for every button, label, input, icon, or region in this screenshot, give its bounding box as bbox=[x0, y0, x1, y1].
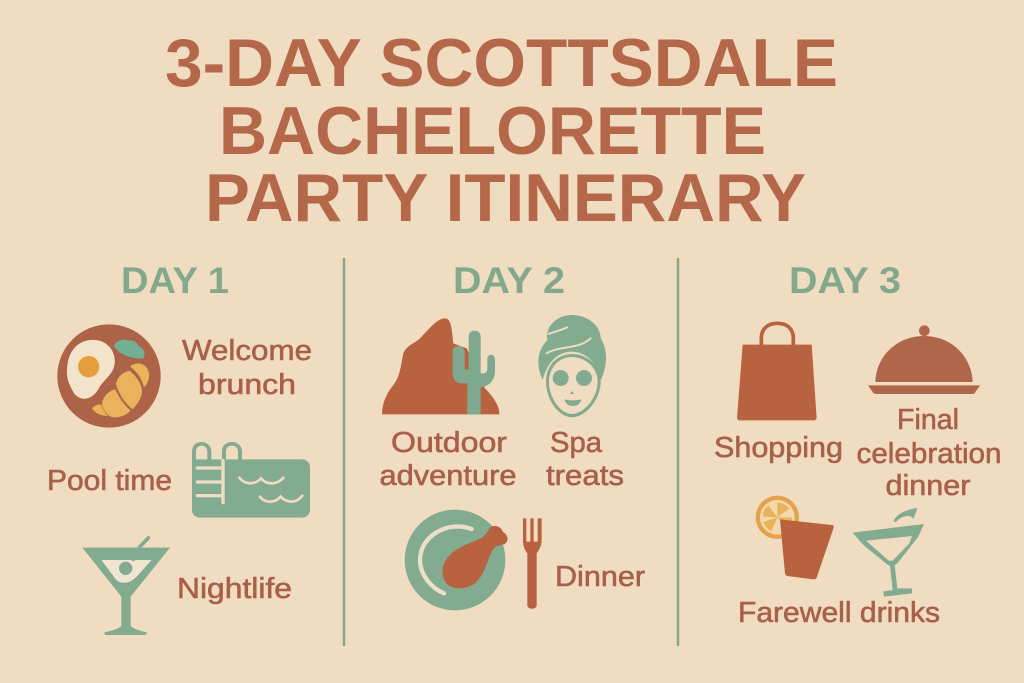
icon: citrus drink bbox=[756, 496, 834, 579]
label: final celebration dinner: dinner bbox=[886, 470, 971, 502]
heading: day 3: DAY 3 bbox=[789, 260, 901, 301]
label: welcome brunch: Welcome bbox=[182, 335, 312, 367]
title bbox=[165, 25, 838, 236]
title: BACHELORETTE bbox=[219, 93, 766, 169]
icon: pool bbox=[192, 442, 310, 518]
panel: day 2 bbox=[380, 260, 645, 610]
label: nightlife: Nightlife bbox=[177, 573, 292, 605]
title: PARTY ITINERARY bbox=[205, 160, 806, 236]
label: welcome brunch: brunch bbox=[198, 369, 296, 401]
title: 3-DAY SCOTTSDALE bbox=[165, 25, 838, 101]
icon: cocktail glass bbox=[853, 508, 924, 597]
label: dinner: Dinner bbox=[555, 561, 645, 593]
label: outdoor adventure: adventure bbox=[380, 460, 516, 492]
panel: day 3 bbox=[714, 260, 1002, 629]
label: outdoor adventure: Outdoor bbox=[391, 427, 507, 459]
icon: martini glass bbox=[82, 538, 170, 635]
heading: day 2: DAY 2 bbox=[453, 260, 565, 301]
label: spa treats: Spa bbox=[550, 427, 603, 459]
label: farewell drinks: Farewell drinks bbox=[738, 597, 940, 629]
label: shopping: Shopping bbox=[714, 432, 843, 464]
panel: day 1 bbox=[47, 260, 312, 635]
label: spa treats: treats bbox=[546, 460, 624, 492]
heading: day 1: DAY 1 bbox=[121, 260, 229, 301]
label: final celebration dinner: Final bbox=[897, 404, 959, 436]
icon: shopping bag bbox=[737, 323, 817, 420]
icon: mountain and cactus bbox=[382, 318, 499, 414]
label: pool time: Pool time bbox=[47, 465, 172, 497]
label: final celebration dinner: celebration bbox=[856, 438, 1002, 470]
icon: dinner plate with chicken bbox=[405, 510, 542, 610]
icon: brunch plate bbox=[57, 324, 161, 428]
icon: spa face mask bbox=[538, 315, 606, 417]
icon: serving cloche bbox=[868, 325, 980, 394]
